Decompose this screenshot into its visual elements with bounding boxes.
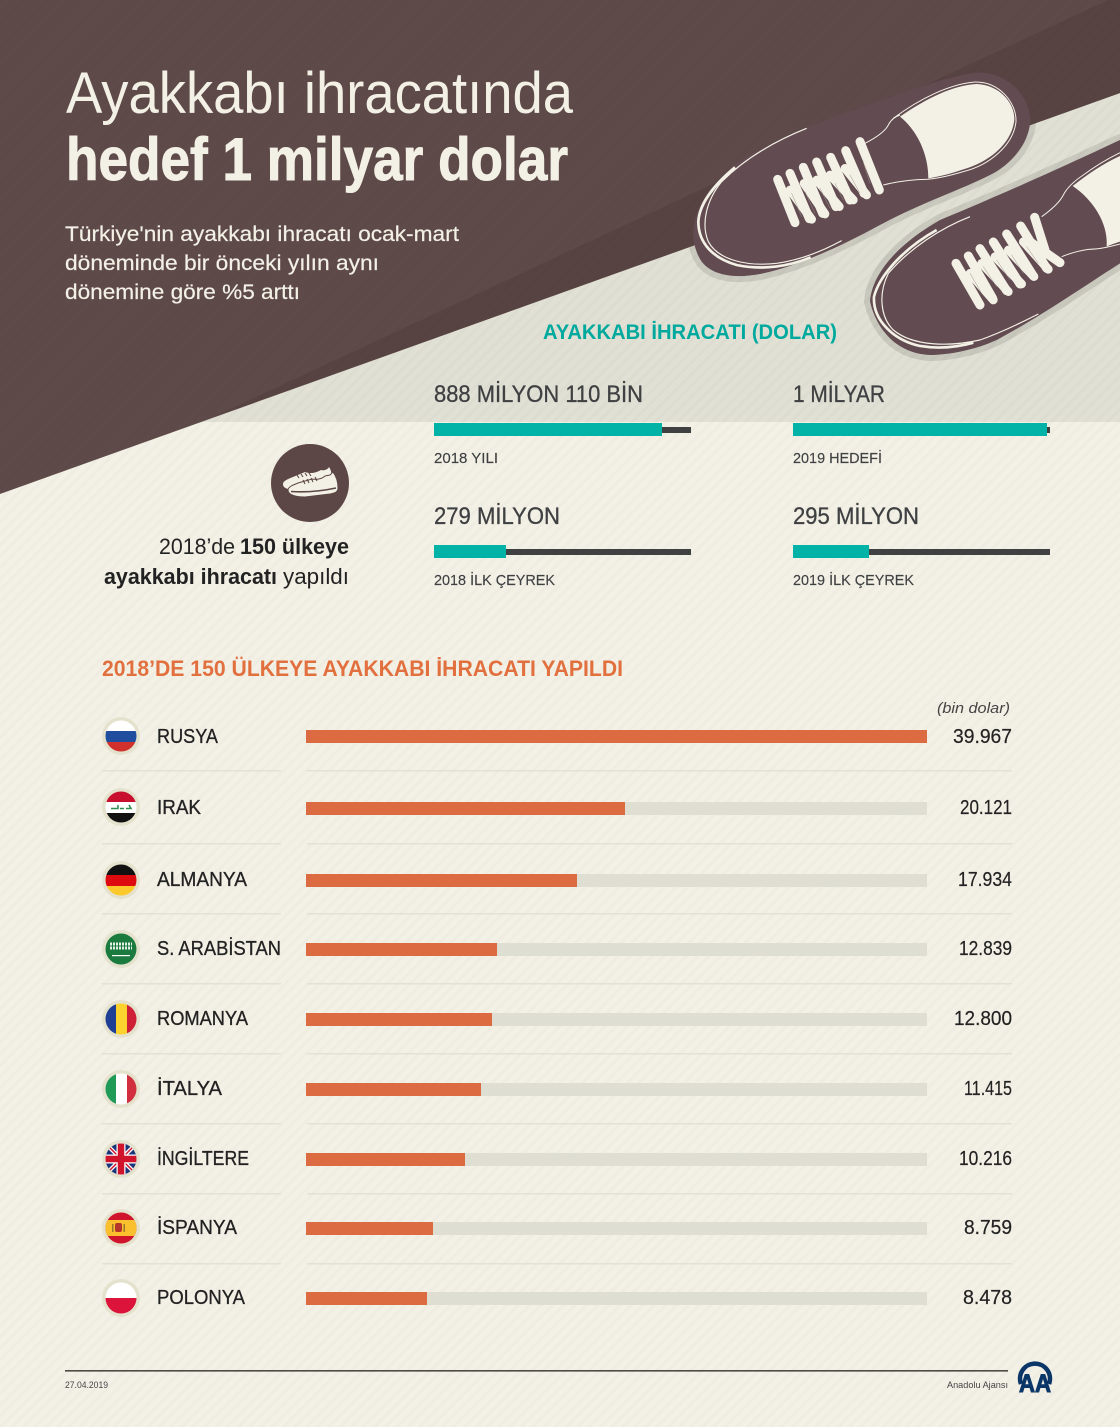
date: 27.04.2019 — [65, 1380, 108, 1390]
row: İtalya: 11.415 — [964, 1078, 1012, 1100]
flag: Romania — [102, 1000, 140, 1038]
title — [66, 61, 574, 193]
icon: sneakers in circle — [271, 444, 349, 522]
row: Rusya — [102, 717, 1012, 772]
flag: Poland — [102, 1279, 140, 1317]
flag: Saudi Arabia — [102, 930, 140, 968]
row: İspanya: İSPANYA — [157, 1216, 238, 1239]
intro paragraph: dönemine göre %5 arttı — [65, 281, 300, 304]
row: Almanya: 17.934 — [958, 869, 1012, 891]
logo: Anadolu Ajansı: AA — [1019, 1370, 1051, 1398]
row: İspanya: 8.759 — [964, 1217, 1012, 1239]
row: İtalya: İTALYA — [157, 1077, 223, 1100]
callout: 150 countries: 2018’de — [159, 534, 235, 559]
stat: 2018 yılı — [434, 381, 691, 467]
stat: 2019 hedefi — [793, 381, 1050, 467]
title line 1: Ayakkabı ihracatında — [66, 61, 574, 126]
intro paragraph — [65, 223, 459, 304]
row: İspanya — [102, 1209, 1012, 1264]
callout: 150 countries: ayakkabı ihracatı — [104, 564, 277, 589]
stat: 2019 ilk çeyrek: 295 MİLYON — [793, 503, 919, 530]
row: Irak: 20.121 — [960, 797, 1012, 819]
stat: 2018 ilk çeyrek: 2018 İLK ÇEYREK — [434, 571, 555, 589]
callout: 150 countries — [104, 534, 349, 589]
row: Irak — [102, 788, 1012, 844]
row: Polonya — [102, 1279, 1012, 1317]
intro paragraph: Türkiye'nin ayakkabı ihracatı ocak-mart — [65, 223, 459, 246]
source: Anadolu Ajansı — [947, 1380, 1008, 1391]
flag: Iraq — [102, 788, 140, 826]
row: S. Arabistan: S. ARABİSTAN — [157, 937, 281, 960]
stat: 2019 ilk çeyrek — [793, 503, 1050, 589]
export section heading: AYAKKABI İHRACATI (DOLAR) — [543, 321, 837, 344]
row: Romanya — [102, 1000, 1012, 1054]
intro paragraph: döneminde bir önceki yılın aynı — [65, 252, 379, 275]
stat: 2018 yılı: 2018 YILI — [434, 450, 498, 467]
row: Polonya: 8.478 — [963, 1287, 1012, 1309]
row: Romanya: ROMANYA — [157, 1008, 249, 1030]
row: S. Arabistan — [102, 930, 1012, 984]
row: Rusya: 39.967 — [953, 726, 1012, 748]
row: S. Arabistan: 12.839 — [959, 938, 1012, 960]
stat: 2018 yılı: 888 MİLYON 110 BİN — [434, 381, 643, 408]
flag: Spain — [102, 1209, 140, 1247]
row: İngiltere: 10.216 — [959, 1148, 1012, 1170]
stat: 2018 ilk çeyrek — [434, 503, 691, 589]
stat: 2018 ilk çeyrek: 279 MİLYON — [434, 503, 560, 530]
row: İtalya — [102, 1070, 1012, 1124]
ranking heading: 2018’DE 150 ÜLKEYE AYAKKABI İHRACATI YAPILDI — [102, 656, 623, 681]
stat: 2019 hedefi: 2019 HEDEFİ — [793, 449, 882, 467]
footer — [65, 1364, 1051, 1398]
row: İngiltere — [102, 1140, 1012, 1194]
row: Almanya: ALMANYA — [157, 869, 248, 891]
shoe left — [693, 73, 1030, 276]
stat: 2019 hedefi: 1 MİLYAR — [793, 381, 885, 408]
row: Rusya: RUSYA — [157, 726, 219, 748]
row: Polonya: POLONYA — [157, 1287, 246, 1309]
callout: 150 countries: yapıldı — [283, 564, 349, 589]
title line 2: hedef 1 milyar dolar — [66, 126, 568, 193]
flag: United Kingdom — [102, 1140, 140, 1178]
shoe right — [870, 140, 1120, 355]
callout: 150 countries: 150 ülkeye — [240, 534, 349, 559]
row: Irak: IRAK — [157, 797, 202, 819]
flag: Russia — [102, 717, 140, 755]
flag: Germany — [102, 861, 140, 899]
stat: 2019 ilk çeyrek: 2019 İLK ÇEYREK — [793, 571, 914, 589]
flag: Italy — [102, 1070, 140, 1108]
shoes illustration — [693, 73, 1120, 355]
row: Almanya — [102, 861, 1012, 914]
row: İngiltere: İNGİLTERE — [157, 1147, 249, 1170]
unit note: (bin dolar) — [937, 700, 1010, 717]
row: Romanya: 12.800 — [954, 1008, 1012, 1030]
